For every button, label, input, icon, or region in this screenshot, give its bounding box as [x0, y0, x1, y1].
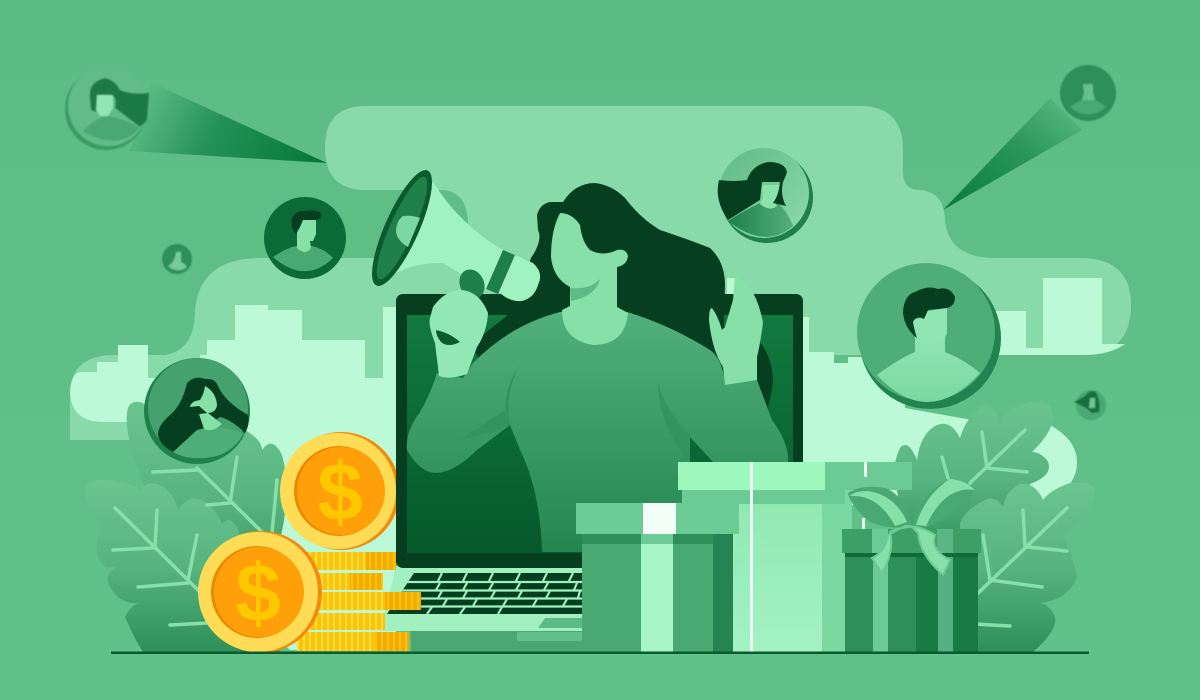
avatar: woman left: [144, 358, 250, 464]
bow loops: [848, 487, 912, 528]
leaf veins: right: [942, 430, 1067, 626]
laptop base: [411, 631, 733, 652]
sleeve shadow: right: [658, 383, 690, 470]
hair: [470, 183, 773, 425]
coin: lower: $: [235, 548, 281, 639]
laptop: [380, 294, 803, 652]
foliage: right front leaf: [960, 482, 1095, 652]
avatar: woman top centre: [718, 148, 813, 243]
laptop foot: [517, 632, 587, 641]
sleeve shadow: left: [460, 365, 520, 440]
thumb knob: [455, 265, 489, 303]
megaphone rim: [361, 164, 443, 292]
gift ribbon line: [750, 462, 753, 652]
avatar: small left: [162, 244, 192, 274]
avatar: top left: [65, 66, 149, 150]
light cloud band: [70, 106, 1131, 440]
megaphone: [361, 164, 540, 301]
coin: upper: $: [317, 447, 363, 538]
leaf veins: left: [113, 457, 277, 625]
megaphone cone: [384, 182, 540, 301]
avatar: top right: [1060, 65, 1116, 121]
laptop screen: [407, 315, 793, 553]
megaphone inner: [396, 216, 420, 247]
foliage: right back leaf: [894, 402, 1053, 560]
megaphone mouth: [368, 172, 436, 284]
neck and face: [551, 213, 628, 345]
gift lid: [678, 462, 912, 490]
beam: right: [943, 98, 1082, 210]
smile: [570, 279, 600, 301]
hand: right: [709, 275, 763, 385]
avatar: man dark: [264, 197, 346, 279]
foliage: left back leaf: [127, 402, 287, 600]
gift body: [733, 490, 845, 652]
gift: large back: [678, 462, 912, 652]
gift: right with bow: [842, 479, 981, 652]
coin: lower: [198, 531, 322, 653]
hand: left with megaphone grip: [430, 290, 488, 378]
illustration: woman with megaphone emerging from laptop: [64, 64, 1131, 654]
avatar: small right: [1074, 390, 1106, 420]
skyline: pale city silhouette: [70, 278, 1125, 650]
coin: upper: [280, 432, 400, 550]
beam: left: [130, 82, 327, 163]
grip detail: [436, 330, 460, 345]
woman: [361, 164, 788, 552]
keyboard: [387, 573, 590, 614]
megaphone band: [486, 250, 515, 294]
foliage: left front leaf: [85, 480, 280, 652]
torso and sleeves: [407, 312, 788, 552]
bow tails: [872, 526, 950, 575]
ground line: [111, 652, 1089, 654]
trackpad: [538, 618, 590, 628]
avatar: man large right: [857, 263, 1001, 409]
gift: left: [576, 503, 739, 652]
laptop screen frame: [396, 294, 803, 568]
coins stack: [297, 552, 421, 651]
